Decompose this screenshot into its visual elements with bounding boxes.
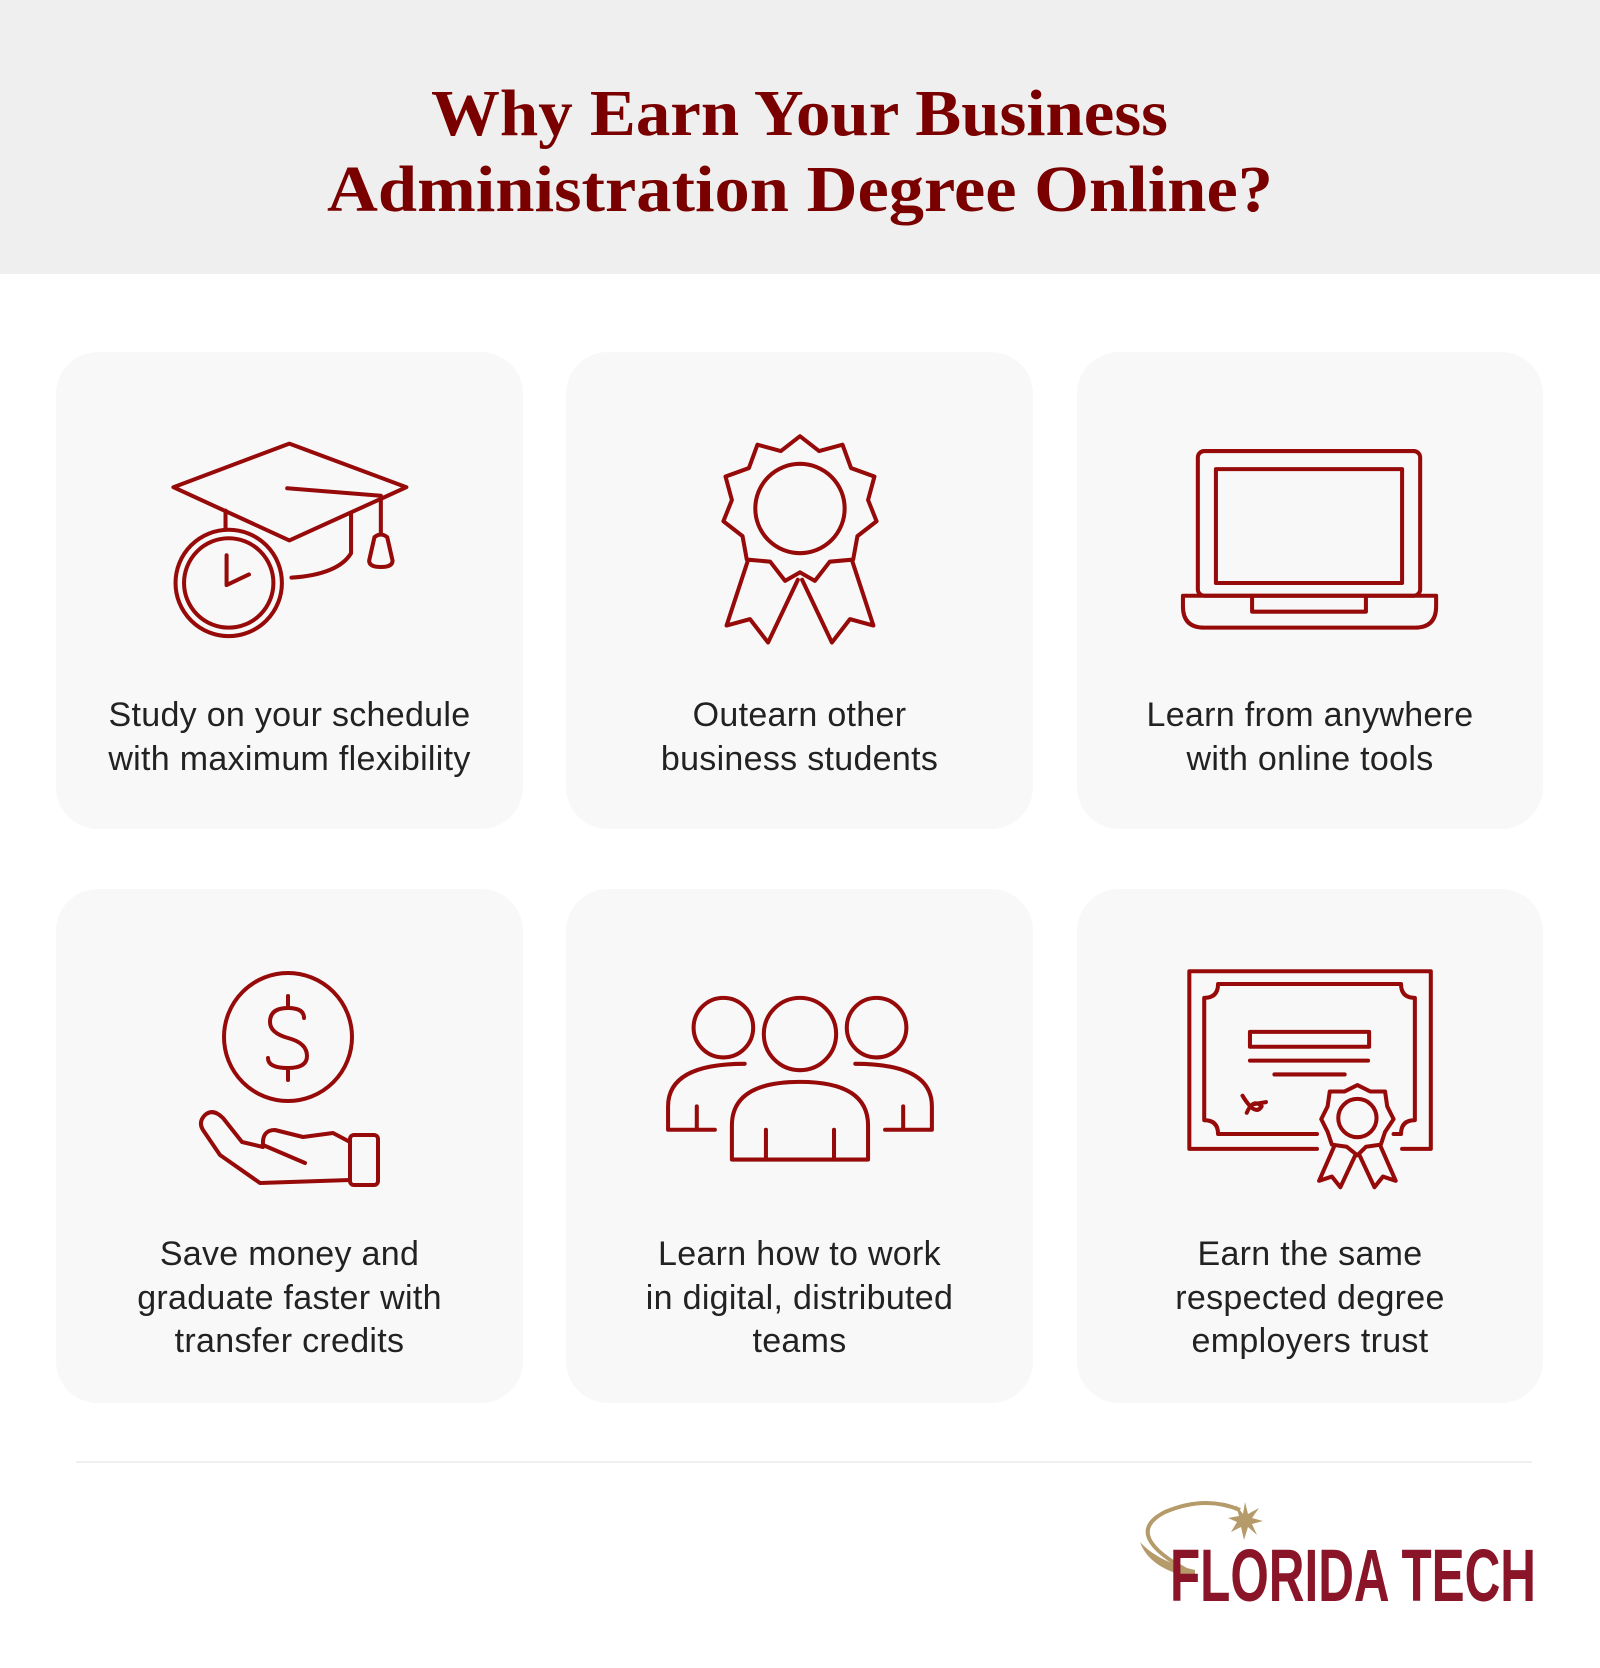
text: card 3 [1146,696,1473,778]
icon: money hand [201,973,378,1185]
text: card 4 [137,1235,442,1360]
title: Why Earn Your Business [431,77,1168,150]
text: card 4: Save money and [160,1235,419,1273]
icon: laptop [1183,451,1436,628]
icon: diploma certificate [1189,971,1431,1187]
card 6 [1077,889,1543,1403]
icon: team of three people [668,998,932,1160]
logo: Florida Tech [1140,1502,1536,1617]
card 2 [566,352,1033,829]
text: card 6: employers trust [1192,1322,1428,1360]
text: card 5 [646,1235,953,1360]
title [327,77,1273,226]
text: card 3: with online tools [1186,740,1434,778]
text: card 1: Study on your schedule [109,696,470,734]
card 4 [56,889,523,1403]
text: card 5: teams [752,1322,847,1360]
text: card 6: Earn the same [1197,1235,1423,1273]
text: card 2 [661,696,938,778]
icon: award rosette [723,436,877,643]
card 5 [566,889,1033,1403]
text: card 4: graduate faster with [137,1279,442,1317]
text: card 6 [1175,1235,1445,1360]
icon: graduation cap with clock [173,444,406,636]
text: card 5: Learn how to work [658,1235,941,1273]
text: card 1: with maximum flexibility [108,740,471,778]
text: card 2: business students [661,740,938,778]
text: card 6: respected degree [1175,1279,1445,1317]
text: card 4: transfer credits [175,1322,404,1360]
text: card 1 [108,696,471,778]
header background [0,0,1600,274]
title: Administration Degree Online? [327,153,1273,226]
text: card 2: Outearn other [693,696,906,734]
text: card 3: Learn from anywhere [1146,696,1473,734]
card 1 [56,352,523,829]
card 3 [1077,352,1543,829]
text: card 5: in digital, distributed [646,1279,953,1317]
